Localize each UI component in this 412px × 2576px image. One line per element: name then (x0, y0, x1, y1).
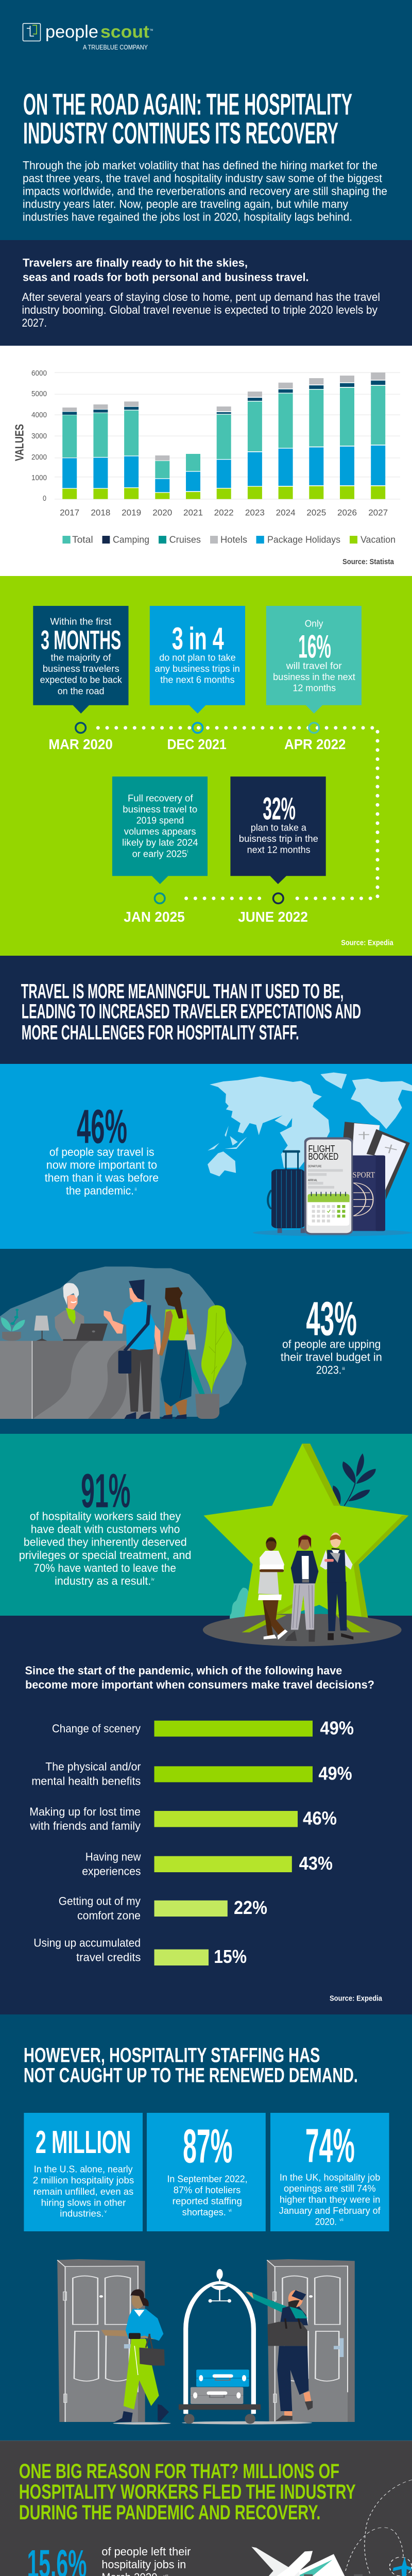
year labels: 2018 (91, 508, 110, 517)
receptionist (55, 1283, 84, 1340)
backpack (286, 2574, 382, 2576)
card: 74%: January and February of (279, 2205, 381, 2216)
row: health benefits: 49% (318, 1762, 352, 1784)
stat: 91%: 91% (81, 1464, 131, 1518)
tall plant (195, 1305, 232, 1419)
legend: Camping (113, 534, 149, 545)
background blob (0, 1266, 247, 1418)
panel: travel more meaningful heading (0, 956, 412, 1064)
door left (57, 2259, 145, 2422)
bell cart (179, 2269, 261, 2424)
callout: 3 in 4: the next 6 months (160, 674, 235, 685)
card: 2 million: v (105, 2209, 107, 2214)
stat: 46%: the pandemic. (66, 1184, 134, 1197)
heading (19, 2460, 356, 2524)
stat: 43%: their travel budget in (281, 1351, 382, 1364)
row: travel credits: Using up accumulated (33, 1937, 141, 1950)
stat: 91%: of hospitality workers said they (30, 1510, 181, 1523)
stat: 91% (19, 1464, 191, 1587)
subheading (23, 257, 309, 284)
question heading: Since the start of the pandemic, which of the following have (25, 1664, 342, 1677)
laptop (63, 1324, 108, 1341)
marker: June 2022 (238, 893, 308, 925)
stat: 91%: privileges or special treatment, and (19, 1549, 191, 1562)
phone: DEPARTURE (308, 1165, 322, 1168)
card: 74%: higher than they were in (280, 2194, 380, 2205)
callout: 32%: 32% (263, 791, 296, 826)
card: 2 million: hiring slows in other (41, 2197, 126, 2208)
question heading (25, 1664, 374, 1691)
callout: 3 in 4: 3 in 4 (172, 621, 224, 656)
row: new experiences: experiences (82, 1865, 141, 1877)
marker: Apr 2022: APR 2022 (284, 736, 346, 752)
card: 2 million: 2 MILLION (36, 2125, 131, 2160)
woman with handbag (101, 2289, 169, 2422)
card: 2 million: remain unfilled, even as (33, 2186, 133, 2197)
row: new experiences: 43% (299, 1853, 333, 1874)
text block: 2027. (22, 316, 47, 329)
card: 74%: In the UK, hospitality job (280, 2172, 380, 2182)
year labels: 2026 (337, 508, 357, 517)
legend: Vacation (360, 534, 396, 545)
stat: 91%: 70% have wanted to leave the (33, 1562, 176, 1574)
stat: 46%: ii (135, 1187, 136, 1192)
card: 74%: 2020. (315, 2216, 337, 2227)
row: new experiences (82, 1851, 333, 1877)
callout: 3 months: the majority of (50, 652, 111, 663)
legend: Cruises (169, 534, 201, 545)
marker: June 2022: JUNE 2022 (238, 909, 308, 925)
year labels: 2022 (214, 508, 234, 517)
panel: travel decisions survey (0, 1616, 412, 2014)
card: 2 million (24, 2113, 143, 2231)
man with bag (246, 2290, 313, 2421)
row: new experiences: Having new (85, 1851, 141, 1863)
callout: 32%: plan to take a (251, 822, 307, 833)
row: change of scenery: Change of scenery (52, 1722, 141, 1735)
axis labels: 2000 (31, 453, 47, 462)
source: Source: Expedia (330, 1994, 383, 2003)
axis title: VALUES (12, 424, 26, 461)
text block: After several years of staying close to home, pent up demand has the travel (22, 291, 380, 303)
stat: 91%: industry as a result. (55, 1574, 151, 1587)
callout: 16%: 16% (298, 629, 331, 665)
card: 87%: shortages. (182, 2207, 226, 2217)
marker: Dec 2021 (167, 723, 227, 752)
suitcase (268, 1150, 305, 1233)
desk plant (1, 1309, 25, 1341)
row: travel credits: 15% (214, 1946, 247, 1967)
panel: 43% (0, 1249, 412, 1434)
heading (24, 2044, 358, 2087)
illustration: travel gear with flight paths (78, 2480, 412, 2576)
lamp (34, 1316, 49, 1341)
stat: 43%: iii (342, 1366, 345, 1371)
callout: full recovery: likely by late 2024 (122, 837, 198, 848)
callout: full recovery: i (187, 849, 188, 854)
row: comfort zone: 22% (234, 1897, 267, 1918)
year labels: 2021 (183, 508, 203, 517)
text block (22, 291, 380, 329)
stat: 46%: now more important to (46, 1158, 157, 1171)
card: 74% (270, 2113, 389, 2231)
axis labels: 0 (43, 495, 46, 503)
stat: 15.6% (27, 2543, 191, 2576)
stat: 43%: 43% (306, 1292, 357, 1346)
card: 74%: vii (339, 2217, 344, 2222)
card: 74%: openings are still 74% (284, 2183, 376, 2194)
year labels: 2027 (368, 508, 388, 517)
marker: Apr 2022 (284, 723, 346, 752)
row: comfort zone (59, 1895, 267, 1922)
reception desk (0, 1341, 160, 1419)
callout: 16%: business in the next (273, 671, 355, 682)
row: lost time: Making up for lost time (29, 1805, 141, 1818)
door right (267, 2259, 355, 2422)
callout: full recovery: or early 2025 (132, 848, 187, 859)
callout: 3 months (33, 606, 129, 714)
manager (285, 1534, 318, 1642)
phone: ARRIVAL (308, 1179, 318, 1182)
bush (230, 1588, 249, 1632)
year labels: 2020 (152, 508, 172, 517)
panel: staffing gap (0, 2014, 412, 2441)
plane: large white (247, 2547, 313, 2576)
marker: Mar 2020: MAR 2020 (48, 736, 113, 752)
card: 2 million: In the U.S. alone, nearly (34, 2164, 133, 2175)
flight paths right (244, 2480, 412, 2576)
illustration: hospitality staff on star (203, 1444, 408, 1646)
panel: 91% (0, 1434, 412, 1616)
card: 87%: vi (229, 2208, 232, 2213)
question heading: become more important when consumers make travel decisions? (25, 1679, 374, 1691)
row: health benefits: The physical and/or (45, 1760, 141, 1773)
illustration: map, luggage, phone, passport (208, 1073, 412, 1236)
panel: workers fled (0, 2441, 412, 2576)
row: comfort zone: Getting out of my (59, 1895, 141, 1908)
housekeeper (258, 1537, 288, 1640)
stat: 15.6%: of people left their (101, 2545, 191, 2558)
male guest (104, 1279, 161, 1419)
logo: peoplescout (23, 22, 153, 51)
passport: SPORT (353, 1171, 375, 1180)
phone: BOOKED (308, 1152, 338, 1162)
phone: FLIGHT (308, 1144, 335, 1155)
text block: industry booming. Global travel revenue is expected to triple 2020 levels by (22, 303, 377, 316)
row: health benefits (31, 1760, 352, 1788)
axis labels: 3000 (31, 432, 47, 440)
card: 2 million: 2 million hospitality jobs (33, 2175, 134, 2185)
title (23, 88, 352, 150)
intro text: impacts worldwide, and the reverberations and recovery are still shaping the (23, 184, 387, 198)
legend: Hotels (220, 534, 247, 545)
legend (62, 534, 396, 545)
callout: 3 months: expected to be back (40, 674, 123, 685)
timeline dots (98, 728, 377, 899)
intro text: past three years, the travel and hospitality industry saw some of the biggest (23, 172, 382, 184)
star (203, 1444, 408, 1632)
callout: full recovery: Full recovery of (128, 792, 193, 803)
subheading: seas and roads for both personal and business travel. (23, 271, 309, 284)
marker: Dec 2021: DEC 2021 (167, 736, 227, 752)
callout: 3 in 4: any business trips in (154, 663, 240, 674)
card: 87% (147, 2113, 266, 2231)
intro text: Through the job market volatility that has defined the hiring market for the (23, 159, 377, 172)
stacked bar chart (12, 369, 400, 517)
intro text: industry years later. Now, people are traveling again, but while many (23, 198, 348, 210)
stat: 91%: believed they inherently deserved (24, 1536, 187, 1549)
callout: 16%: will travel for (286, 660, 342, 671)
legend: Package Holidays (267, 534, 340, 545)
phone (304, 1137, 353, 1235)
leaf branch (333, 1453, 376, 1506)
axis labels: 4000 (31, 411, 47, 419)
year labels: 2023 (245, 508, 265, 517)
year labels: 2017 (60, 508, 79, 517)
panel: revenue chart (0, 346, 412, 576)
stat: 15.6%: hospitality jobs in (101, 2558, 186, 2571)
row: lost time: with friends and family (29, 1820, 141, 1833)
subheading: Travelers are finally ready to hit the skies, (23, 257, 248, 269)
panel: business travel timeline (0, 576, 412, 956)
illustration: hotel reception (0, 1266, 247, 1419)
panel: intro (0, 0, 412, 240)
waiter (320, 1533, 353, 1640)
ground ellipse (203, 1614, 402, 1646)
callout: full recovery: 2019 spend (136, 815, 184, 826)
marker: Mar 2020 (48, 723, 113, 752)
year labels: 2024 (276, 508, 296, 517)
card: 87%: reported staffing (173, 2196, 242, 2207)
logo: peoplescout: scout (100, 22, 149, 42)
stat: 91%: iv (151, 1577, 154, 1582)
callout: 3 months: on the road (58, 685, 104, 696)
card: 87%: 87% (183, 2120, 233, 2173)
stat: 46% (45, 1099, 159, 1197)
stat: 43%: 2023. (316, 1364, 341, 1377)
heading (21, 980, 361, 1044)
row: lost time: 46% (303, 1807, 337, 1828)
intro text: industries have regained the jobs lost in 2020, hospitality lags behind. (23, 210, 352, 224)
callout: 32%: next 12 months (247, 844, 311, 855)
logo: peoplescout: TM (150, 29, 153, 32)
source: Source: Expedia (341, 939, 394, 947)
panel: travelers ready (0, 240, 412, 346)
callout: 16%: 12 months (293, 683, 336, 693)
card: 87%: In September 2022, (167, 2173, 248, 2184)
stat: 46%: them than it was before (45, 1171, 159, 1184)
illustration: hotel doors, luggage cart and workers (57, 2259, 355, 2425)
axis labels: 5000 (31, 390, 47, 398)
logo: peoplescout: A TRUEBLUE COMPANY (83, 43, 148, 51)
card: 74%: 74% (305, 2119, 355, 2173)
map (217, 2554, 345, 2576)
marker: Jan 2025 (124, 893, 185, 925)
stat: 46%: of people say travel is (49, 1145, 154, 1158)
year labels: 2025 (306, 508, 326, 517)
female guest (159, 1287, 205, 1419)
card: 87%: 87% of hoteliers (174, 2184, 241, 2195)
boarding passes (341, 1122, 410, 1199)
stat: 43% (281, 1292, 382, 1377)
stat: 43%: of people are upping (282, 1338, 381, 1351)
callout: 32%: buisness trip in the (239, 833, 318, 844)
year labels: 2019 (122, 508, 141, 517)
callout: 3 in 4: do not plan to take (159, 652, 236, 663)
callout: 16% (266, 606, 362, 714)
world map (208, 1073, 412, 1176)
card: 2 million: industries. (60, 2208, 104, 2219)
bars (62, 372, 385, 499)
row: change of scenery (52, 1718, 354, 1739)
row: change of scenery: 49% (320, 1718, 354, 1739)
callout: full recovery: volumes appears (124, 826, 196, 837)
year labels (60, 508, 388, 517)
panel: 46% (0, 1064, 412, 1249)
axis labels: 6000 (31, 369, 47, 378)
floor shadows (113, 2421, 312, 2425)
marker: Jan 2025: JAN 2025 (124, 909, 185, 925)
source: Source: Statista (342, 558, 394, 566)
callout: full recovery: business travel to (123, 804, 197, 815)
callout: 3 months: business travelers (43, 663, 119, 674)
row: travel credits: travel credits (76, 1951, 141, 1964)
callout: 16%: Only (305, 618, 323, 629)
axis labels: 1000 (31, 474, 47, 482)
stat: 46%: 46% (77, 1099, 127, 1153)
calendar (307, 1192, 350, 1226)
callout: 32% (230, 776, 326, 884)
stat: 91%: have dealt with customers who (31, 1523, 180, 1536)
logo: peoplescout: people (45, 22, 98, 42)
callout: 3 months: 3 MONTHS (41, 625, 121, 655)
callout: full recovery (112, 776, 208, 884)
callout: 3 months: Within the first (50, 616, 111, 627)
row: health benefits: mental health benefits (31, 1775, 141, 1788)
axis labels (31, 369, 47, 503)
legend: Total (72, 534, 93, 545)
row: lost time (29, 1805, 337, 1833)
suitcases on cart (191, 2369, 249, 2404)
passport (350, 1156, 385, 1231)
intro text (23, 159, 387, 224)
callout: 3 in 4 (150, 606, 245, 714)
row: comfort zone: comfort zone (77, 1909, 141, 1922)
planes: blue (137, 2557, 411, 2576)
row: travel credits (33, 1937, 247, 1967)
